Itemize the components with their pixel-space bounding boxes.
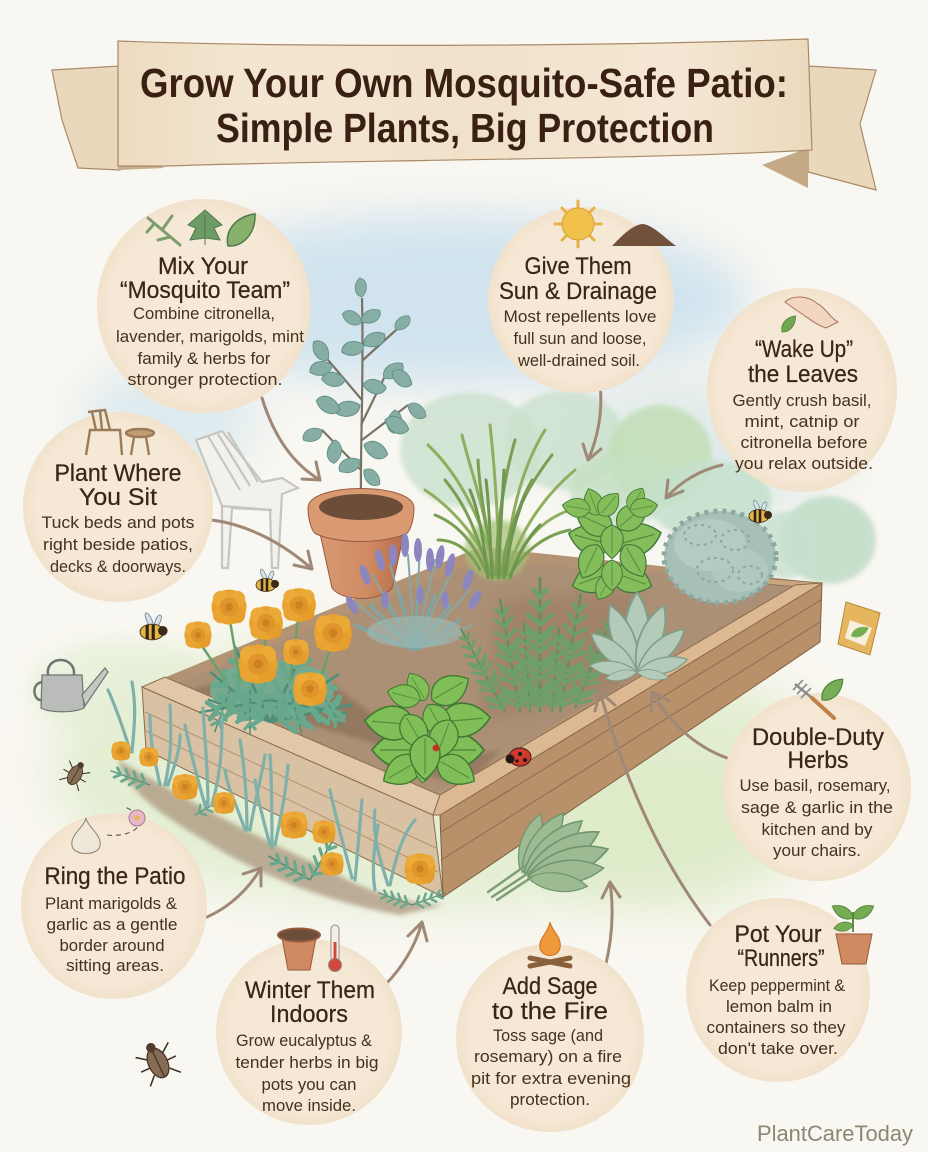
panel: mix your mosquito team: family & herbs for xyxy=(138,349,271,368)
bed soil interior xyxy=(142,547,822,815)
icon: potted seedling xyxy=(830,901,876,964)
ladybug on bed rail xyxy=(506,748,531,766)
banner panel xyxy=(118,39,812,166)
icon: three leaves xyxy=(147,208,262,252)
body text: Plant marigolds & xyxy=(45,894,178,913)
panel: mix your mosquito team: lavender, marigolds, mint xyxy=(116,327,304,346)
panel: pot your runners: “Runners” xyxy=(738,945,825,972)
panel: pot your runners xyxy=(686,898,870,1082)
heading: Ring the Patio xyxy=(44,863,186,890)
heading: Double-Duty xyxy=(752,724,884,751)
panel: add sage to the fire: pit for extra evening xyxy=(471,1069,631,1088)
arrow: ring to border xyxy=(192,868,261,922)
panel: double-duty herbs xyxy=(723,693,911,881)
panel: wake up the leaves: you relax outside. xyxy=(735,454,873,473)
icon: fork and leaf xyxy=(793,674,848,718)
arrow: winter to border xyxy=(385,922,427,985)
bees xyxy=(140,500,772,640)
heading: Plant Where xyxy=(54,460,182,487)
beetle near watering can xyxy=(58,756,93,792)
raised garden bed xyxy=(142,547,822,897)
eucalyptus tree xyxy=(301,278,429,505)
panel: winter them indoors: move inside. xyxy=(262,1096,356,1115)
bushes behind the bed xyxy=(400,390,876,584)
front border of blades and marigolds xyxy=(108,682,448,911)
panel: pot your runners: don't take over. xyxy=(718,1039,838,1058)
icon: sun xyxy=(555,201,601,247)
basil plant xyxy=(363,667,492,793)
sage bundle xyxy=(488,807,612,900)
back rail xyxy=(695,573,822,587)
panel: give them sun and drainage: well-drained soil. xyxy=(517,351,640,370)
body text: Tuck beds and pots xyxy=(42,513,194,532)
panel: wake up the leaves: citronella before xyxy=(740,433,868,452)
terracotta pot xyxy=(308,488,414,598)
soil patch along front border xyxy=(118,760,445,915)
body text: Use basil, rosemary, xyxy=(740,776,890,795)
panel: add sage to the fire: to the Fire xyxy=(492,998,608,1025)
white patio chair xyxy=(196,431,298,568)
left ribbon tail xyxy=(52,66,120,170)
panel: give them sun and drainage: full sun and loose, xyxy=(514,329,646,348)
panel: winter them indoors: Indoors xyxy=(270,1001,348,1028)
panel: ring the patio: sitting areas. xyxy=(66,956,164,975)
panel: wake up the leaves xyxy=(707,288,897,492)
panel: winter them indoors: tender herbs in big xyxy=(236,1053,378,1072)
panel: add sage to the fire: rosemary) on a fire xyxy=(474,1047,622,1066)
title text xyxy=(140,60,788,151)
panel: mix your mosquito team xyxy=(97,199,311,413)
citronella grass xyxy=(425,425,575,580)
panel: plant where you sit: You Sit xyxy=(79,484,157,511)
beetle bottom left xyxy=(131,1035,183,1087)
title text: Grow Your Own Mosquito-Safe Patio: xyxy=(140,60,788,106)
icon: soil pile xyxy=(612,224,676,246)
sage plant xyxy=(585,592,691,683)
arrow: runners to bed xyxy=(595,692,710,925)
panel: wake up the leaves: the Leaves xyxy=(748,361,858,388)
heading: Give Them xyxy=(524,253,632,280)
heading: “Wake Up” xyxy=(755,336,853,363)
panel: winter them indoors: pots you can xyxy=(262,1075,356,1094)
left front rail xyxy=(142,687,443,897)
icon: small pot and thermometer xyxy=(278,925,342,972)
panel: give them sun and drainage: Sun & Drainage xyxy=(499,278,657,305)
arrow: mix team to tree xyxy=(262,398,320,480)
heading: Mix Your xyxy=(158,253,248,280)
title text: Simple Plants, Big Protection xyxy=(216,105,714,151)
icon: hand crushing leaf xyxy=(778,297,838,335)
seed packet xyxy=(838,602,880,655)
heading: Pot Your xyxy=(734,921,822,948)
icon: garlic and flower xyxy=(72,807,145,854)
panel: double-duty herbs: sage & garlic in the xyxy=(741,798,893,817)
right front rail xyxy=(440,583,822,897)
body text: Keep peppermint & xyxy=(709,976,846,995)
panel: ring the patio: border around xyxy=(60,936,164,955)
body text: Most repellents love xyxy=(504,307,656,326)
panel: mix your mosquito team: “Mosquito Team” xyxy=(120,277,290,304)
watermark: PlantCareToday xyxy=(757,1121,913,1146)
panel: winter them indoors xyxy=(216,939,402,1125)
panel: plant where you sit: right beside patios, xyxy=(43,535,193,554)
panel: pot your runners: lemon balm in xyxy=(726,997,832,1016)
panel: plant where you sit xyxy=(23,412,213,602)
panel: ring the patio: garlic as a gentle xyxy=(46,915,178,934)
panel: add sage to the fire: protection. xyxy=(510,1090,590,1109)
lavender xyxy=(344,533,484,650)
heading: Add Sage xyxy=(502,973,598,1000)
sky and ground watercolor wash xyxy=(30,215,850,910)
panel: add sage to the fire xyxy=(456,944,644,1132)
arrow: plant where you sit to pot xyxy=(212,520,312,569)
rosemary xyxy=(450,577,624,717)
panel: wake up the leaves: mint, catnip or xyxy=(744,412,860,431)
marigold plant xyxy=(184,588,355,736)
title banner ribbon xyxy=(52,39,876,190)
icon: bistro chair and table xyxy=(86,410,154,455)
dusty silver plant xyxy=(664,511,776,603)
heading: Winter Them xyxy=(245,977,375,1004)
panel: double-duty herbs: your chairs. xyxy=(773,841,861,860)
arrow: double-duty to bed xyxy=(651,692,733,760)
panel: pot your runners: containers so they xyxy=(706,1018,846,1037)
mint plant xyxy=(561,484,665,604)
right ribbon tail xyxy=(808,66,876,190)
arrow: sage fire to bundle xyxy=(602,882,620,968)
panel: mix your mosquito team: stronger protection. xyxy=(128,370,282,389)
panel: plant where you sit: decks & doorways. xyxy=(50,557,186,576)
panel: double-duty herbs: Herbs xyxy=(788,747,848,774)
ladybug on basil xyxy=(433,745,439,751)
body text: Combine citronella, xyxy=(133,304,275,323)
body text: Grow eucalyptus & xyxy=(236,1031,373,1050)
arrow: sun to grass xyxy=(583,385,601,460)
watering can xyxy=(34,660,108,712)
arrows xyxy=(192,385,733,985)
panel: ring the patio xyxy=(21,813,207,999)
body text: Gently crush basil, xyxy=(732,391,872,410)
panel: double-duty herbs: kitchen and by xyxy=(762,820,873,839)
icon: campfire xyxy=(530,922,570,966)
body text: Toss sage (and xyxy=(493,1026,603,1045)
panel: give them sun and drainage xyxy=(488,207,674,393)
arrow: wake up to mint xyxy=(666,465,722,498)
